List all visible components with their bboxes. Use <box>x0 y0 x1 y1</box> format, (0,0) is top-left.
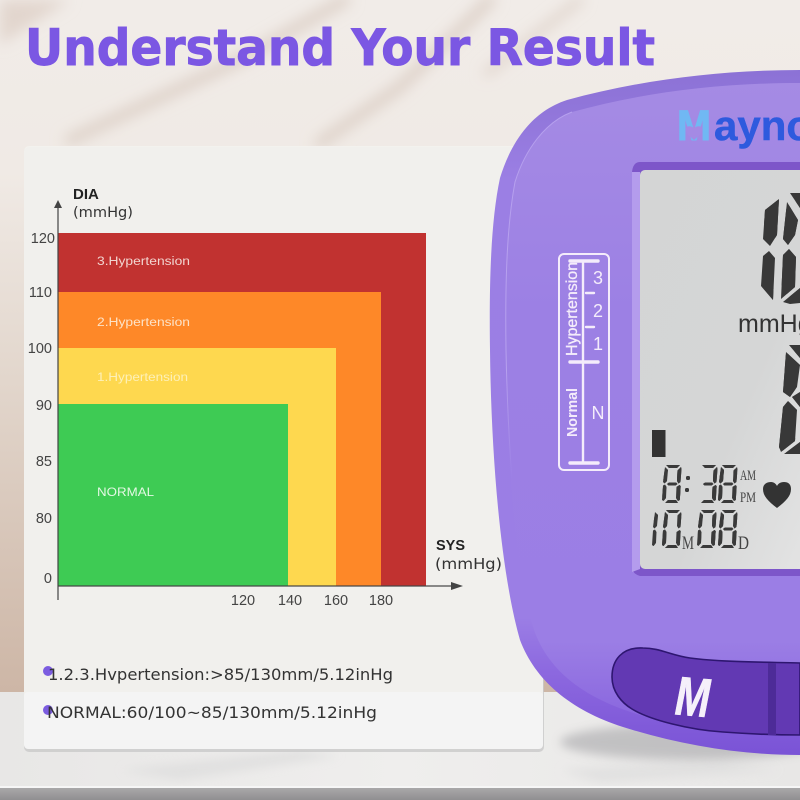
chart: pressure zones <box>58 233 426 586</box>
date labels: D <box>738 533 749 554</box>
gauge levels: N <box>592 403 604 423</box>
x axis labels <box>231 593 393 609</box>
zone label: 1.Hypertension: 1.Hypertension <box>97 372 188 384</box>
logo mark: M: M <box>677 102 711 150</box>
y axis labels: 90 <box>36 398 52 414</box>
zone: stage 2 hypertension <box>58 292 381 586</box>
gauge levels: 3 <box>593 268 603 288</box>
clock period labels: AM <box>740 468 756 484</box>
y axis labels: 100 <box>28 341 52 357</box>
gauge levels <box>592 268 604 423</box>
zone: stage 1 hypertension <box>58 348 336 586</box>
axis title: SYS: SYS <box>436 538 465 554</box>
date: day: 08 <box>696 502 740 560</box>
y axis labels: 120 <box>31 231 55 247</box>
date: month: 10 <box>650 502 684 560</box>
axis unit: SYS mmHg: (mmHg) <box>435 555 502 573</box>
x axis labels: 180 <box>369 593 393 609</box>
date labels <box>682 533 749 554</box>
reading: systolic digits <box>761 193 800 304</box>
y axis labels: 0 <box>44 571 52 587</box>
x axis labels: 120 <box>231 593 255 609</box>
y axis labels: 110 <box>29 285 52 301</box>
gauge levels: 1 <box>593 334 603 354</box>
zone: stage 3 hypertension <box>58 233 426 586</box>
note: normal range: NORMAL:60/100~85/130mm/5.12inHg <box>47 703 377 722</box>
classification gauge <box>559 254 609 470</box>
y axis labels <box>28 231 55 587</box>
zone label: NORMAL: NORMAL <box>97 487 155 499</box>
button label: M <box>670 665 717 729</box>
zone: normal <box>58 404 288 586</box>
zone label: 2.Hypertension: 2.Hypertension <box>97 317 190 329</box>
button divider <box>768 663 776 735</box>
gauge label: Hypertension: Hypertension <box>564 262 581 356</box>
title: Understand Your Result <box>25 19 655 77</box>
chart axes <box>54 200 463 600</box>
clock: 8:38 <box>660 457 740 515</box>
brand logo <box>677 102 800 150</box>
LCD screen <box>640 167 800 569</box>
icon: heart <box>763 482 791 508</box>
axis title: DIA: DIA <box>73 186 99 203</box>
clock period labels <box>740 468 756 506</box>
date labels: M <box>682 533 694 554</box>
x axis labels: 140 <box>278 593 302 609</box>
axis unit: DIA mmHg: (mmHg) <box>73 205 133 221</box>
level bar <box>652 430 666 457</box>
y axis labels: 85 <box>36 454 52 470</box>
device body <box>490 70 800 755</box>
button: M <box>612 648 800 735</box>
y axis labels: 80 <box>36 511 52 527</box>
note: hypertension range: 1.2.3.Hvpertension:>85/130mm/5.12inHg <box>48 665 393 684</box>
zone label: 3.Hypertension: 3.Hypertension <box>97 256 190 268</box>
device: blood pressure monitor <box>490 70 800 760</box>
device shadow <box>560 724 800 760</box>
x axis labels: 160 <box>324 593 348 609</box>
panel: blood pressure chart card <box>24 146 544 752</box>
screen bezel <box>632 162 800 576</box>
gauge levels: 2 <box>593 301 603 321</box>
clock period labels: PM <box>740 490 756 506</box>
gauge label: Normal: Normal <box>564 388 581 437</box>
device face <box>506 83 800 736</box>
